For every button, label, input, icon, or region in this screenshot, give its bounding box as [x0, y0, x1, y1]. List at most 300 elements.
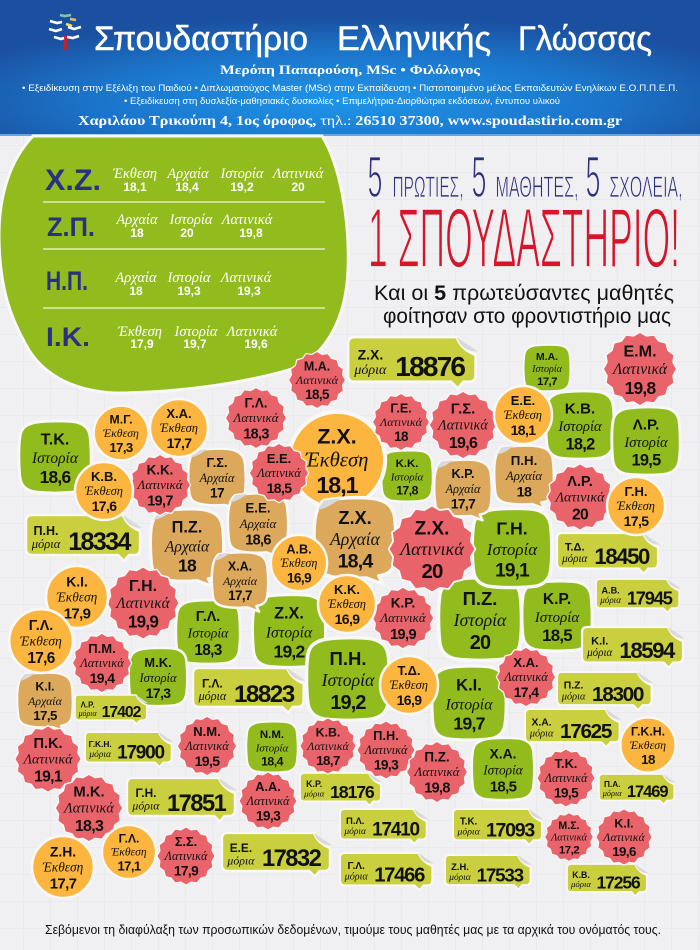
orange badge: Ε.Ε. Έκθεση 18,1: Έκθεση [503, 408, 542, 422]
red badge: Γ.Σ. Λατινικά 19,6 [430, 392, 496, 458]
note: Ζ.Χ. 18876: Ζ.Χ. [358, 346, 383, 362]
note: Κ.Ρ. 18176: 18176 [330, 782, 375, 802]
note: Γ.Η. 17851: 17851 [167, 791, 227, 817]
green badge: Π.Ζ. Ιστορία 20: Π.Ζ. [463, 588, 497, 609]
red badge: Γ.Λ. Λατινικά 18,3: 18,3 [243, 427, 269, 443]
green badge: Μ.Κ. Ιστορία 17,3: 17,3 [146, 685, 171, 701]
note: Γ.Λ. 18823 [193, 668, 306, 713]
green badge: Ν.Μ. Ιστορία 18,4 [246, 721, 298, 773]
green badge: Χ.Α. Ιστορία 18,5: Ιστορία [482, 762, 524, 777]
tan badge: Ε.Ε. Αρχαία 18,6: 18,6 [245, 533, 271, 549]
note: Κ.Β. 17256 [567, 864, 648, 896]
tan badge: Π.Ζ. Αρχαία 18: Π.Ζ. [172, 518, 202, 536]
orange badge: Τ.Δ. Έκθεση 16,9: Τ.Δ. [397, 663, 421, 678]
note: Ε.Ε. 17832 [222, 833, 332, 877]
row: Χ.Ζ.: 18,4 [175, 180, 199, 194]
green badge: Ζ.Χ. Ιστορία 19,2: 19,2 [273, 641, 306, 661]
green badge: Κ.Ρ. Ιστορία 18,5: 18,5 [542, 626, 572, 645]
note: Λ.Ρ. 17402 [75, 695, 148, 724]
red badge: Κ.Κ. Λατινικά 19,7 [130, 455, 190, 515]
red badge: Μ.Σ. Λατινικά 17,2 [545, 813, 593, 861]
tan badge: Π.Η. Αρχαία 18: Π.Η. [511, 453, 537, 468]
orange badge: Γ.Λ. Έκθεση 17,1: Γ.Λ. [119, 832, 139, 846]
red badge: Τ.Κ. Λατινικά 19,5 [538, 750, 594, 806]
orange badge: Α.Β. Έκθεση 16,9: Α.Β. [286, 542, 312, 556]
orange badge: Γ.Κ.Η. Έκθεση 18: Έκθεση [629, 738, 666, 752]
subheading line 1: Και οι 5 πρωτεύσαντες μαθητές [374, 282, 674, 305]
red badge: Ζ.Χ. Λατινικά 20: 20 [422, 560, 443, 583]
row: Η.Π.: Η.Π. [46, 266, 88, 296]
red badge: Γ.Η. Λατινικά 19,9: Λατινικά [114, 595, 171, 612]
icon: book tree logo [49, 15, 81, 50]
note: Ζ.Η. 17533: Ζ.Η. [451, 862, 469, 872]
green badge: Γ.Λ. Ιστορία 18,3: Γ.Λ. [196, 609, 220, 625]
tan badge: Ζ.Χ. Αρχαία 18,4: 18,4 [338, 550, 373, 572]
red badge: Σ.Σ. Λατινικά 17,9: Σ.Σ. [175, 834, 197, 849]
green badge: Κ.Ρ. Ιστορία 18,5: Ιστορία [534, 610, 580, 626]
row: Ι.Κ.: 19,6 [244, 337, 268, 351]
note: Π.Η. 18334: 18334 [68, 528, 131, 556]
note: Α.Β. 17945 [596, 579, 681, 613]
orange badge: Γ.Η. Έκθεση 17,5 [607, 477, 665, 535]
heading: 5 πρωτιές: 5 [472, 145, 486, 210]
note: Γ.Λ. 18823: Γ.Λ. [202, 676, 223, 690]
note: Γ.Κ.Η. 17900 [85, 732, 173, 767]
tan badge: Κ.Ρ. Αρχαία 17,7: Αρχαία [445, 482, 481, 496]
green badge: Λ.Ρ. Ιστορία 19,5: Ιστορία [623, 435, 668, 451]
row: Ι.Κ.: Λατινικά [225, 324, 278, 340]
red badge: Π.Η. Λατινικά 19,3 [358, 722, 414, 778]
orange badge: Μ.Γ. Έκθεση 17,3 [94, 406, 148, 460]
note: Κ.Ρ. 18176 [300, 773, 382, 806]
orange badge: Ζ.Χ. Έκθεση 18,1: 18,1 [316, 472, 359, 498]
orange badge: Ε.Ε. Έκθεση 18,1 [494, 386, 552, 444]
row: Ζ.Π.: Λατινικά [220, 212, 273, 228]
row: Χ.Ζ.: Αρχαία [166, 166, 209, 182]
red badge: Κ.Β. Λατινικά 18,7: 18,7 [316, 753, 340, 768]
note: Γ.Λ. 17466 [340, 853, 434, 890]
note: Γ.Λ. 18823: 18823 [234, 681, 295, 708]
red badge: Λ.Ρ. Λατινικά 20 [548, 465, 612, 529]
note: Π.Λ. 17410: Π.Λ. [346, 816, 364, 827]
green badge: Λ.Ρ. Ιστορία 19,5 [612, 407, 680, 475]
green badge: Ν.Μ. Ιστορία 18,4: 18,4 [261, 754, 284, 768]
note: Α.Β. 17945: Α.Β. [601, 586, 620, 596]
green badge: Γ.Η. Ιστορία 19,1: Γ.Η. [496, 518, 528, 538]
red badge: Λ.Ρ. Λατινικά 20: 20 [572, 506, 589, 523]
tan badge: Κ.Ι. Αρχαία 17,5: Κ.Ι. [35, 680, 55, 694]
green badge: Χ.Α. Ιστορία 18,5: Χ.Α. [489, 745, 517, 761]
title: Σπουδαστήριο [94, 20, 308, 58]
red badge: Ν.Μ. Λατινικά 19,5: Ν.Μ. [193, 724, 221, 739]
green badge: Μ.Α. Ιστορία 17,7 [524, 345, 570, 391]
red badge: Ν.Μ. Λατινικά 19,5: 19,5 [195, 753, 220, 769]
row: Ζ.Π.: Ιστορία [168, 212, 213, 228]
orange badge: Ζ.Η. Έκθεση 17,7: Ζ.Η. [50, 843, 76, 859]
tan badge: Κ.Ρ. Αρχαία 17,7 [434, 460, 492, 520]
red badge: Π.Ζ. Λατινικά 19,8: 19,8 [424, 781, 450, 797]
tan badge: Π.Η. Αρχαία 18: Αρχαία [505, 469, 542, 483]
green badge: Κ.Κ. Ιστορία 17,8: Κ.Κ. [396, 458, 418, 470]
red badge: Γ.Η. Λατινικά 19,9: 19,9 [128, 612, 158, 631]
red badge: Μ.Α. Λατινικά 18,5: Μ.Α. [304, 359, 330, 373]
red badge: Κ.Β. Λατινικά 18,7 [300, 718, 356, 774]
note: Τ.Δ. 18450 [557, 533, 660, 574]
note: Π.Η. 18334 [26, 515, 142, 561]
header banner [0, 0, 700, 136]
note: Τ.Κ. 17093: μόρια [456, 827, 481, 838]
green badge: Ζ.Χ. Ιστορία 19,2: Ζ.Χ. [274, 604, 304, 622]
red badge: Σ.Σ. Λατινικά 17,9: 17,9 [174, 864, 199, 879]
green badge: Κ.Ι. Ιστορία 19,7: Κ.Ι. [456, 676, 482, 694]
tan badge: Χ.Α. Αρχαία 17,7: Αρχαία [222, 574, 258, 588]
green badge: Γ.Λ. Ιστορία 18,3: Ιστορία [187, 626, 229, 640]
credentials line 2: • Εξειδίκευση στη δυσλεξία-μαθησιακές δυσκολίες • Επιμελήτρια-Διορθώτρια εκδόσεων, έντυπου υλικού [124, 96, 560, 106]
red badge: Π.Η. Λατινικά 19,3: Π.Η. [373, 728, 399, 743]
red badge: Π.Κ. Λατινικά 19,1: Π.Κ. [33, 736, 63, 752]
note: Κ.Β. 17256: Κ.Β. [572, 870, 590, 880]
red badge: Κ.Κ. Λατινικά 19,7: Κ.Κ. [147, 463, 173, 478]
tan badge: Κ.Ι. Αρχαία 17,5 [17, 673, 73, 731]
tan badge: Κ.Ι. Αρχαία 17,5: 17,5 [33, 708, 58, 723]
green badge: Χ.Α. Ιστορία 18,5 [472, 738, 534, 800]
red badge: Π.Κ. Λατινικά 19,1 [16, 727, 80, 791]
green badge: Π.Ζ. Ιστορία 20: Ιστορία [453, 610, 507, 630]
green badge: Γ.Η. Ιστορία 19,1 [472, 508, 552, 588]
orange badge: Κ.Κ. Έκθεση 16,9 [318, 575, 376, 633]
note: Γ.Λ. 17466: Γ.Λ. [348, 861, 365, 872]
orange badge: Γ.Η. Έκθεση 17,5: 17,5 [624, 513, 649, 529]
row: Ζ.Π.: 19,8 [239, 226, 263, 240]
orange badge: Ζ.Η. Έκθεση 17,7 [32, 836, 94, 898]
tan badge: Ε.Ε. Αρχαία 18,6 [228, 493, 288, 557]
orange badge: Γ.Λ. Έκθεση 17,6 [9, 609, 73, 673]
green badge: Μ.Κ. Ιστορία 17,3 [129, 648, 187, 706]
red badge: Χ.Α. Λατινικά 17,4 [497, 648, 555, 706]
note: Χ.Α. 17625: 17625 [560, 720, 612, 743]
green badge: Μ.Α. Ιστορία 17,7: Ιστορία [531, 364, 563, 375]
green badge: Κ.Κ. Ιστορία 17,8: Ιστορία [390, 471, 424, 483]
note: Γ.Κ.Η. 17900: μόρια [88, 750, 112, 760]
note: Π.Λ. 17410: 17410 [372, 820, 420, 841]
row: Ι.Κ. [46, 322, 278, 352]
orange badge: Ζ.Η. Έκθεση 17,7: Έκθεση [42, 859, 84, 874]
orange badge: Κ.Κ. Έκθεση 16,9: 16,9 [335, 611, 360, 627]
red badge: Κ.Ι. Λατινικά 19,6: 19,6 [612, 844, 636, 859]
orange badge: Μ.Γ. Έκθεση 17,3: 17,3 [109, 440, 133, 455]
red badge: Μ.Κ. Λατινικά 18,3: Μ.Κ. [73, 785, 105, 801]
orange badge: Κ.Ι. Έκθεση 17,9: 17,9 [64, 605, 91, 622]
green badge: Τ.Κ. Ιστορία 18,6: 18,6 [40, 467, 71, 487]
red badge: Γ.Λ. Λατινικά 18,3 [226, 388, 286, 448]
red badge: Ν.Μ. Λατινικά 19,5 [178, 717, 236, 775]
red badge: Σ.Σ. Λατινικά 17,9 [158, 828, 214, 884]
note: Κ.Ι. 18594: 18594 [619, 638, 676, 663]
red badge: Κ.Ρ. Λατινικά 19,9: 19,9 [390, 627, 416, 643]
row: Ζ.Π.: 20 [180, 226, 194, 240]
note: Κ.Ι. 18594: μόρια [586, 647, 613, 659]
note: Ζ.Χ. 18876: μόρια [353, 363, 387, 378]
red badge: Γ.Η. Λατινικά 19,9 [108, 568, 178, 638]
row: Χ.Ζ.: Έκθεση [112, 166, 157, 182]
note: Π.Α. 17469: μόρια [602, 789, 622, 798]
orange badge: Τ.Δ. Έκθεση 16,9: 16,9 [397, 692, 422, 708]
orange badge: Χ.Α. Έκθεση 17,7: Έκθεση [159, 421, 198, 435]
tan badge: Ε.Ε. Αρχαία 18,6: Ε.Ε. [245, 501, 271, 516]
orange badge: Γ.Η. Έκθεση 17,5: Έκθεση [616, 499, 655, 513]
tan badge: Ε.Ε. Αρχαία 18,6: Αρχαία [239, 517, 276, 531]
note: Τ.Δ. 18450: 18450 [594, 544, 650, 569]
green badge: Χ.Α. Ιστορία 18,5: 18,5 [490, 778, 517, 795]
row: Ζ.Π.: 18 [130, 226, 144, 240]
red badge: Α.Α. Λατινικά 19,3: Α.Α. [255, 779, 281, 794]
red badge: Κ.Ρ. Λατινικά 19,9: Κ.Ρ. [391, 596, 415, 611]
note: Κ.Ι. 18594 [582, 627, 685, 668]
note: Γ.Η. 17851 [127, 778, 237, 822]
row: Ι.Κ.: 19,7 [183, 337, 207, 351]
red badge: Γ.Ε. Λατινικά 18: Λατινικά [379, 415, 423, 429]
orange badge: Γ.Λ. Έκθεση 17,6: Γ.Λ. [29, 618, 53, 634]
green badge: Κ.Κ. Ιστορία 17,8 [381, 450, 433, 502]
red badge: Μ.Κ. Λατινικά 18,3: Λατινικά [62, 801, 114, 817]
orange badge: Κ.Ι. Έκθεση 17,9: Έκθεση [56, 589, 98, 604]
note: Χ.Α. 17625: Χ.Α. [532, 718, 552, 729]
credentials line 1: • Εξειδίκευση στην Εξέλιξη του Παιδιού • Διπλωματούχος Master (MSc) στην Εκπαίδευση • Πιστοποιημένο μέλος Εκπαιδευτών Ενηλίκων Ε.Ο.Π.Π.Ε.Π. [22, 83, 678, 93]
tan badge: Γ.Σ. Αρχαία 17: 17 [210, 486, 225, 501]
title: Ελληνικής [337, 20, 491, 58]
red badge: Μ.Κ. Λατινικά 18,3 [56, 775, 122, 841]
note: Ε.Ε. 17832: Ε.Ε. [230, 841, 252, 855]
row: Χ.Ζ.: 19,2 [230, 180, 254, 194]
row: Η.Π.: Αρχαία [114, 270, 157, 286]
orange badge: Μ.Γ. Έκθεση 17,3: Μ.Γ. [110, 413, 132, 427]
red badge: Γ.Λ. Λατινικά 18,3: Λατινικά [233, 411, 279, 425]
row: Η.Π.: 19,3 [237, 284, 261, 298]
tan badge: Κ.Ρ. Αρχαία 17,7: 17,7 [451, 497, 476, 512]
note: Π.Α. 17469: 17469 [627, 783, 668, 801]
red badge: Ε.Μ. Λατινικά 19,8 [604, 333, 676, 405]
red badge: Κ.Ρ. Λατινικά 19,9: Λατινικά [378, 610, 427, 625]
red badge: Α.Α. Λατινικά 19,3: 19,3 [256, 809, 281, 824]
tan badge: Χ.Α. Αρχαία 17,7 [212, 552, 268, 612]
row: Ι.Κ.: Έκθεση [117, 324, 162, 340]
row: Η.Π. [46, 266, 272, 298]
note: Τ.Δ. 18450: μόρια [561, 553, 588, 565]
red badge: Π.Κ. Λατινικά 19,1: 19,1 [34, 768, 63, 785]
note: Ε.Ε. 17832: μόρια [226, 853, 255, 867]
red badge: Γ.Σ. Λατινικά 19,6: 19,6 [449, 435, 478, 452]
note: Ζ.Η. 17533: μόρια [448, 873, 472, 883]
orange badge: Κ.Β. Έκθεση 17,6 [75, 462, 133, 520]
green badge: Γ.Λ. Ιστορία 18,3: 18,3 [194, 642, 222, 659]
note: Κ.Β. 17256: μόρια [570, 879, 591, 889]
row: Ι.Κ.: Ι.Κ. [46, 322, 90, 352]
orange badge: Γ.Κ.Η. Έκθεση 18: 18 [641, 752, 655, 767]
heading: 5 πρωτιές: ΜΑΘΗΤΕΣ, [496, 171, 578, 204]
green badge: Κ.Ι. Ιστορία 19,7: Ιστορία [444, 696, 493, 713]
orange badge: Ε.Ε. Έκθεση 18,1: 18,1 [511, 422, 536, 438]
note: Κ.Ρ. 18176: μόρια [303, 788, 325, 798]
orange badge: Γ.Λ. Έκθεση 17,6: 17,6 [27, 650, 55, 667]
note: Τ.Κ. 17093 [453, 809, 543, 845]
note: Γ.Λ. 18823: μόρια [198, 689, 227, 703]
orange badge: Γ.Λ. Έκθεση 17,1: 17,1 [117, 859, 141, 874]
red badge: Π.Η. Λατινικά 19,3: Λατινικά [364, 743, 408, 757]
heading: 5 πρωτιές: 5 [586, 145, 600, 210]
tan badge: Ζ.Χ. Αρχαία 18,4: Ζ.Χ. [338, 508, 372, 528]
note: Κ.Ι. 18594: Κ.Ι. [591, 636, 608, 648]
orange badge: Ζ.Χ. Έκθεση 18,1 [289, 412, 385, 508]
green badge: Κ.Ρ. Ιστορία 18,5 [522, 581, 592, 651]
green badge: Κ.Β. Ιστορία 18,2 [546, 391, 614, 459]
row: Χ.Ζ.: 20 [291, 180, 305, 194]
orange badge: Ε.Ε. Έκθεση 18,1: Ε.Ε. [511, 393, 535, 408]
green badge: Λ.Ρ. Ιστορία 19,5: Λ.Ρ. [633, 416, 659, 433]
heading: 5 πρωτιές [368, 145, 682, 210]
note: Τ.Κ. 17093: 17093 [486, 819, 535, 841]
note: Π.Η. 18334: Π.Η. [34, 524, 58, 538]
orange badge: Ζ.Η. Έκθεση 17,7: 17,7 [50, 875, 77, 892]
address line: Χαριλάου Τρικούπη 4, 1ος όροφος, τηλ.: 26510 37300, www.spoudastirio.com.gr [78, 114, 622, 129]
red badge: Χ.Α. Λατινικά 17,4: Χ.Α. [513, 655, 539, 670]
orange badge: Γ.Κ.Η. Έκθεση 18: Γ.Κ.Η. [631, 725, 665, 739]
orange badge: Α.Β. Έκθεση 16,9: 16,9 [287, 570, 312, 585]
red badge: Ε.Ε. Λατινικά 18,5: 18,5 [267, 480, 292, 496]
orange badge: Χ.Α. Έκθεση 17,7 [150, 399, 208, 457]
red badge: Ε.Ε. Λατινικά 18,5: Λατινικά [256, 466, 301, 480]
note: Π.Λ. 17410 [340, 809, 428, 844]
orange badge: Ζ.Χ. Έκθεση 18,1: Έκθεση [305, 450, 368, 472]
note: Ζ.Χ. 18876 [348, 337, 478, 389]
note: Τ.Δ. 18450: Τ.Δ. [565, 542, 585, 554]
row: Η.Π.: 19,3 [177, 284, 201, 298]
green badge: Κ.Β. Ιστορία 18,2: 18,2 [565, 436, 595, 454]
red badge: Σ.Σ. Λατινικά 17,9: Λατινικά [164, 849, 208, 863]
red badge: Ν.Μ. Λατινικά 19,5: Λατινικά [184, 739, 229, 753]
red badge: Κ.Κ. Λατινικά 19,7: 19,7 [147, 494, 173, 510]
row: Χ.Ζ.: 18,1 [123, 180, 147, 194]
red badge: Π.Μ. Λατινικά 19,4 [73, 634, 131, 692]
title: Γλώσσας [518, 20, 652, 58]
note: Χ.Α. 17625 [525, 709, 621, 747]
red badge: Γ.Σ. Λατινικά 19,6: Λατινικά [436, 418, 488, 434]
green badge: Τ.Κ. Ιστορία 18,6: Ιστορία [31, 450, 79, 467]
note: Λ.Ρ. 17402: Λ.Ρ. [81, 701, 95, 710]
red badge: Χ.Α. Λατινικά 17,4: Λατινικά [503, 670, 548, 684]
red badge: Χ.Α. Λατινικά 17,4: 17,4 [514, 684, 539, 700]
green badge: Γ.Η. Ιστορία 19,1: Ιστορία [486, 540, 538, 559]
red badge: Γ.Ε. Λατινικά 18: 18 [394, 429, 409, 444]
note: Γ.Η. 17851: μόρια [131, 798, 160, 812]
row: Η.Π.: 18 [129, 284, 143, 298]
red badge: Ζ.Χ. Λατινικά 20: Ζ.Χ. [415, 518, 449, 539]
red badge: Ε.Μ. Λατινικά 19,8: 19,8 [625, 378, 656, 398]
green badge: Ζ.Χ. Ιστορία 19,2: Ιστορία [265, 624, 313, 641]
green badge: Κ.Β. Ιστορία 18,2: Ιστορία [557, 419, 602, 435]
row: Ζ.Π.: Ζ.Π. [47, 212, 95, 242]
green badge: Μ.Α. Ιστορία 17,7: Μ.Α. [536, 352, 558, 363]
red badge: Κ.Β. Λατινικά 18,7: Κ.Β. [316, 726, 340, 740]
red badge: Μ.Κ. Λατινικά 18,3: 18,3 [75, 818, 104, 835]
green badge: Π.Η. Ιστορία 19,2: 19,2 [330, 692, 366, 714]
row: Η.Π.: Ιστορία [166, 270, 211, 286]
green badge: Κ.Ι. Ιστορία 19,7 [432, 666, 506, 740]
orange badge: Γ.Η. Έκθεση 17,5: Γ.Η. [624, 484, 648, 499]
orange badge: Κ.Β. Έκθεση 17,6: 17,6 [92, 498, 117, 514]
note: Γ.Κ.Η. 17900: 17900 [117, 743, 165, 764]
tan badge: Ζ.Χ. Αρχαία 18,4 [314, 498, 396, 584]
note: Π.Η. 18334: μόρια [31, 537, 61, 551]
orange badge: Κ.Κ. Έκθεση 16,9: Έκθεση [327, 597, 366, 611]
green badge: Κ.Ι. Ιστορία 19,7: 19,7 [453, 714, 486, 734]
orange badge: Γ.Κ.Η. Έκθεση 18 [620, 717, 676, 773]
note: Γ.Κ.Η. 17900: Γ.Κ.Η. [89, 739, 112, 749]
orange badge: Ζ.Χ. Έκθεση 18,1: Ζ.Χ. [317, 423, 357, 448]
note: Π.Α. 17469: Π.Α. [604, 780, 620, 789]
note: Λ.Ρ. 17402: 17402 [102, 704, 142, 721]
red badge: Π.Κ. Λατινικά 19,1: Λατινικά [22, 752, 73, 767]
green badge: Ν.Μ. Ιστορία 18,4: Ιστορία [255, 742, 289, 754]
red badge: Κ.Ι. Λατινικά 19,6: Λατινικά [602, 830, 645, 844]
red badge: Π.Η. Λατινικά 19,3: 19,3 [374, 758, 399, 773]
red badge: Τ.Κ. Λατινικά 19,5: 19,5 [554, 786, 579, 801]
red badge: Π.Μ. Λατινικά 19,4: 19,4 [90, 670, 115, 686]
orange badge: Χ.Α. Έκθεση 17,7: 17,7 [167, 435, 192, 451]
subheading line 2: φοίτησαν στο φροντιστήριο μας [383, 305, 671, 328]
tan badge: Κ.Ι. Αρχαία 17,5: Αρχαία [27, 694, 63, 708]
note: Λ.Ρ. 17402: μόρια [79, 709, 97, 718]
green badge: Τ.Κ. Ιστορία 18,6: Τ.Κ. [41, 431, 69, 449]
note: Π.Ζ. 18300: μόρια [561, 691, 586, 702]
note: Κ.Ρ. 18176: Κ.Ρ. [306, 779, 322, 789]
red badge: Ζ.Χ. Λατινικά 20: Λατινικά [398, 539, 464, 559]
note: Π.Λ. 17410: μόρια [343, 827, 367, 837]
green badge: Γ.Η. Ιστορία 19,1: 19,1 [495, 561, 530, 582]
row: Χ.Ζ.: Λατινικά [271, 166, 324, 182]
tan badge: Π.Ζ. Αρχαία 18: Αρχαία [164, 538, 210, 555]
note: Α.Β. 17945: μόρια [599, 595, 621, 605]
red badge: Α.Α. Λατινικά 19,3 [240, 773, 296, 829]
tan badge: Π.Η. Αρχαία 18: 18 [517, 484, 532, 500]
red badge: Γ.Λ. Λατινικά 18,3: Γ.Λ. [245, 396, 267, 411]
note: Ζ.Η. 17533 [445, 855, 532, 890]
red badge: Κ.Ι. Λατινικά 19,6 [596, 809, 652, 865]
tan badge: Χ.Α. Αρχαία 17,7: 17,7 [228, 588, 252, 603]
red badge: Π.Μ. Λατινικά 19,4: Π.Μ. [88, 641, 116, 656]
orange badge: Κ.Β. Έκθεση 17,6: Κ.Β. [91, 469, 117, 484]
red badge: Μ.Σ. Λατινικά 17,2: 17,2 [559, 844, 579, 856]
red badge: Λ.Ρ. Λατινικά 20: Λατινικά [554, 490, 605, 505]
green badge: Ζ.Χ. Ιστορία 19,2 [252, 595, 326, 667]
green badge: Μ.Α. Ιστορία 17,7: 17,7 [537, 376, 557, 388]
tan badge: Χ.Α. Αρχαία 17,7: Χ.Α. [228, 559, 252, 573]
red badge: Μ.Σ. Λατινικά 17,2: Λατινικά [550, 832, 588, 843]
note: Π.Ζ. 18300: Π.Ζ. [564, 681, 583, 692]
tan badge: Π.Η. Αρχαία 18 [494, 446, 554, 509]
tan badge: Π.Ζ. Αρχαία 18 [150, 509, 224, 586]
red badge: Π.Ζ. Λατινικά 19,8 [407, 742, 467, 802]
green badge: Λ.Ρ. Ιστορία 19,5: 19,5 [631, 452, 661, 470]
orange badge: Α.Β. Έκθεση 16,9 [271, 535, 327, 591]
note: Ζ.Η. 17533: 17533 [477, 864, 524, 885]
tan badge: Γ.Σ. Αρχαία 17: Αρχαία [199, 471, 235, 485]
panel: top students [0, 136, 348, 393]
note: Γ.Λ. 17466: 17466 [374, 864, 425, 886]
tan badge: Κ.Ρ. Αρχαία 17,7: Κ.Ρ. [451, 466, 475, 481]
green badge: Ν.Μ. Ιστορία 18,4: Ν.Μ. [260, 729, 284, 741]
orange badge: Γ.Λ. Έκθεση 17,6: Έκθεση [19, 633, 62, 648]
note: Κ.Β. 17256: 17256 [597, 873, 641, 893]
